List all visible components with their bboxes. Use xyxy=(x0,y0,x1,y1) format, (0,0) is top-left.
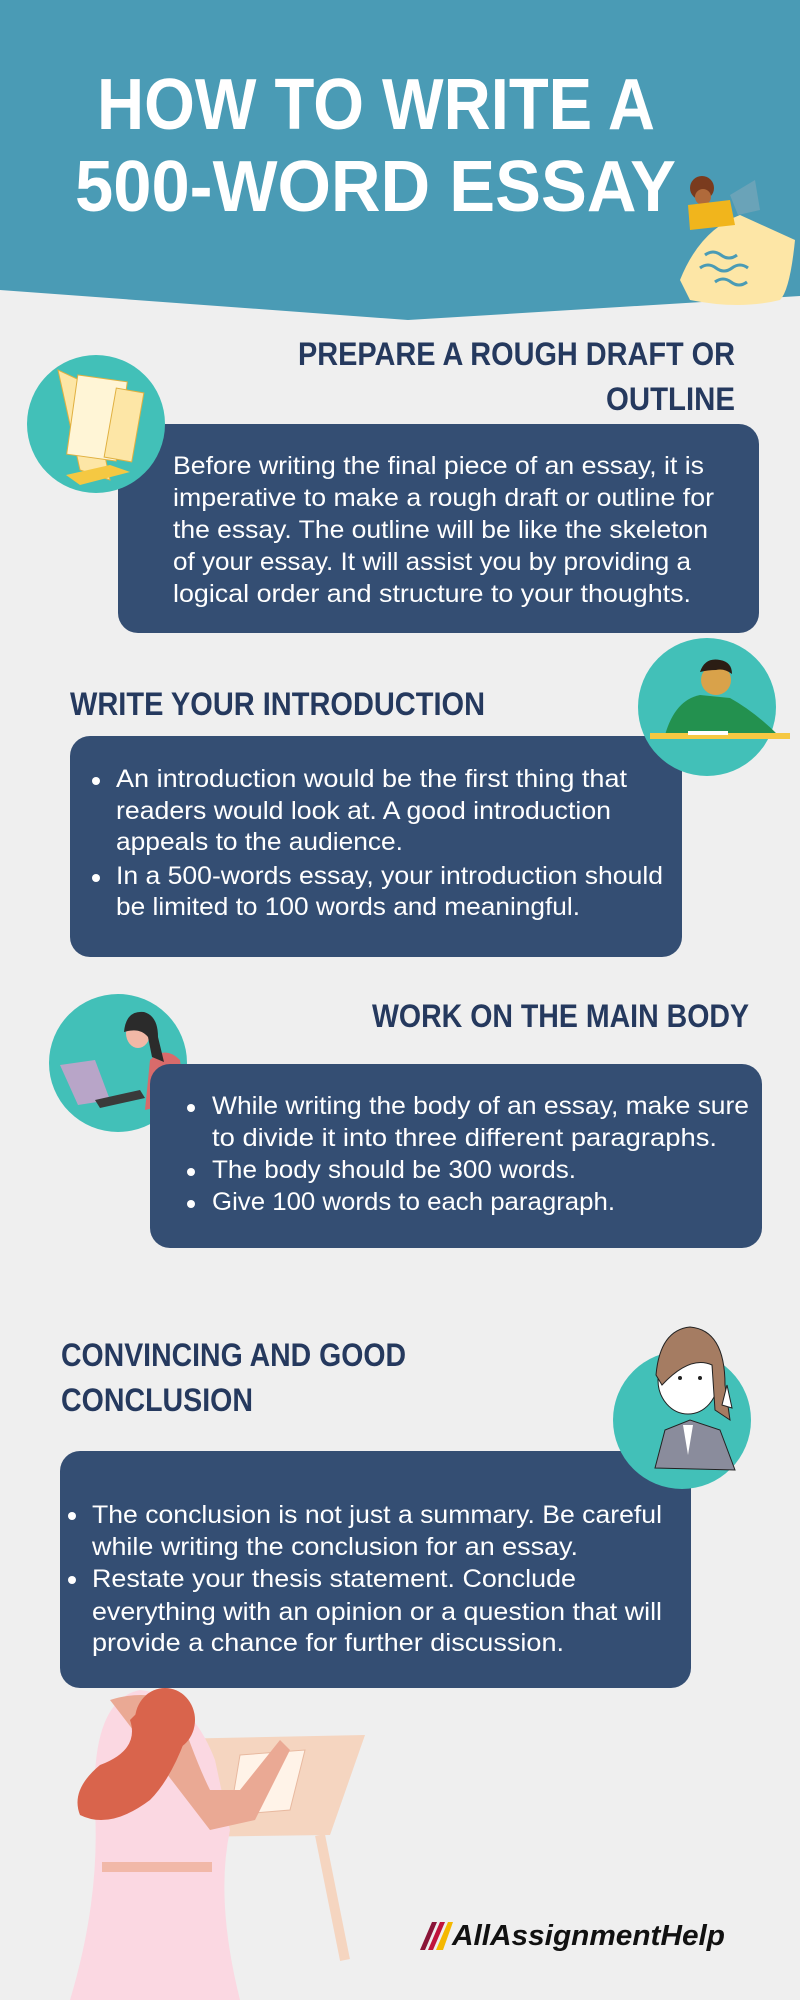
panel: main body xyxy=(150,1064,762,1248)
panel: rough draft: Before writing the final piece of an essay, it is xyxy=(173,452,704,480)
panel: main body: The body should be 300 words. xyxy=(212,1156,576,1184)
panel: introduction xyxy=(70,736,682,957)
title: 500-WORD ESSAY xyxy=(75,147,676,227)
panel: introduction: An introduction would be the first thing that xyxy=(116,765,627,793)
panel: main body: to divide it into three different paragraphs. xyxy=(212,1124,717,1152)
heading: work on the main body: WORK ON THE MAIN BODY xyxy=(372,998,749,1034)
title xyxy=(75,65,676,227)
panel: conclusion: Restate your thesis statement. Conclude xyxy=(92,1565,576,1593)
panel: rough draft: the essay. The outline will be like the skeleton xyxy=(173,516,708,544)
panel: rough draft: imperative to make a rough draft or outline for xyxy=(173,484,714,512)
panel: conclusion: provide a chance for further discussion. xyxy=(92,1629,564,1657)
panel: rough draft: logical order and structure to your thoughts. xyxy=(173,580,691,608)
panel: conclusion xyxy=(60,1451,691,1688)
heading: convincing conclusion: CONVINCING AND GOOD xyxy=(61,1337,406,1373)
icon: woman at desk xyxy=(70,1688,365,2000)
panel: main body: While writing the body of an essay, make sure xyxy=(212,1092,749,1120)
heading: write your introduction: WRITE YOUR INTRODUCTION xyxy=(70,686,485,722)
panel: introduction: appeals to the audience. xyxy=(116,828,403,856)
title: HOW TO WRITE A xyxy=(97,65,655,145)
logo: AllAssignmentHelp xyxy=(451,1920,725,1952)
panel: introduction: In a 500-words essay, your introduction should xyxy=(116,862,663,890)
heading: prepare a rough draft: PREPARE A ROUGH DRAFT OR xyxy=(298,336,735,372)
panel: conclusion: everything with an opinion or a question that will xyxy=(92,1598,662,1626)
panel: rough draft: of your essay. It will assist you by providing a xyxy=(173,548,691,576)
heading: prepare a rough draft: OUTLINE xyxy=(606,381,735,417)
panel: introduction: be limited to 100 words and meaningful. xyxy=(116,893,580,921)
panel: main body: Give 100 words to each paragraph. xyxy=(212,1188,615,1216)
heading: prepare a rough draft xyxy=(298,336,735,417)
heading: convincing conclusion: CONCLUSION xyxy=(61,1382,253,1418)
icon: woman laptop circle xyxy=(49,994,187,1132)
icon: boy writing circle xyxy=(638,638,790,776)
panel: conclusion: while writing the conclusion for an essay. xyxy=(91,1533,578,1561)
icon: businesswoman circle xyxy=(613,1327,751,1489)
icon: kid writing on paper xyxy=(680,176,795,305)
icon: papers circle xyxy=(27,355,165,493)
header banner xyxy=(0,0,800,320)
heading: convincing conclusion xyxy=(61,1337,406,1418)
panel: rough draft xyxy=(118,424,759,633)
panel: conclusion: The conclusion is not just a summary. Be careful xyxy=(92,1501,662,1529)
panel: introduction: readers would look at. A good introduction xyxy=(116,797,611,825)
